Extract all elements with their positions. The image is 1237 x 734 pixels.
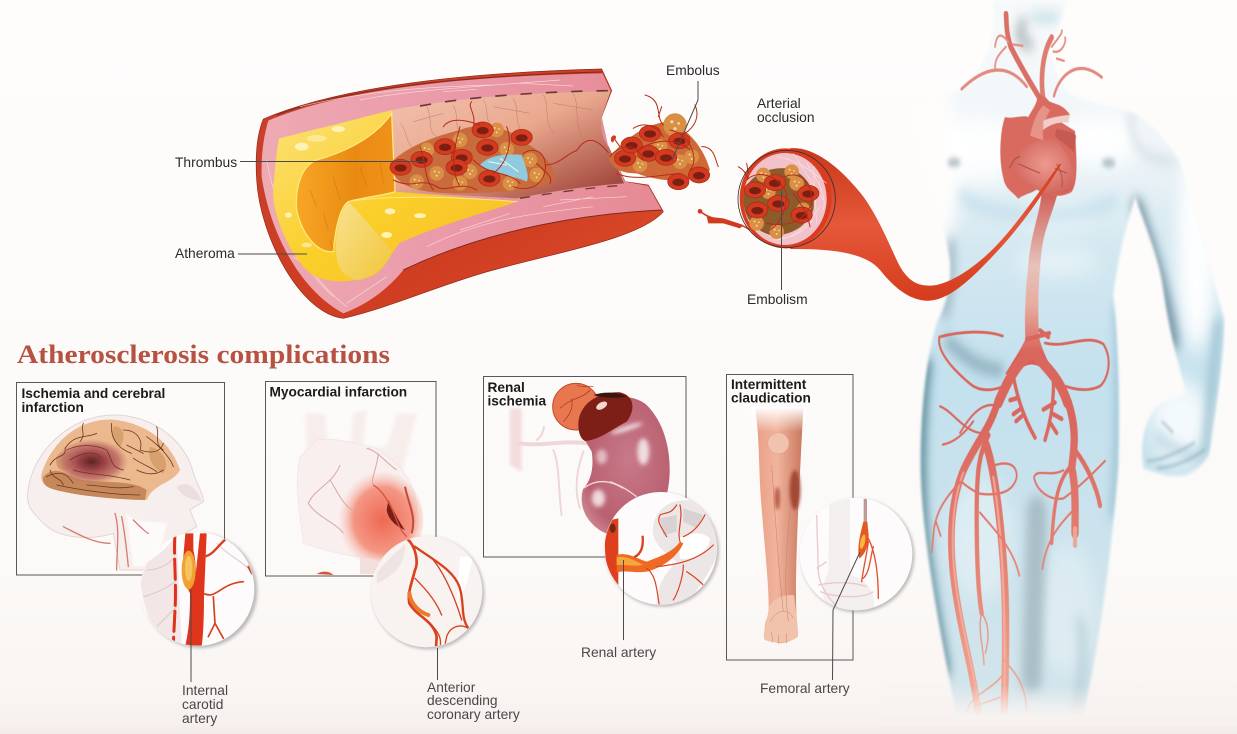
label: renal artery: Renal artery [581, 645, 656, 660]
label: Atheroma: Atheroma [175, 246, 235, 261]
panel: intermittent claudication [726, 374, 853, 660]
label: Embolism [747, 190, 808, 307]
nipples [947, 158, 961, 167]
icon: infarcted kidney pole [553, 383, 599, 430]
panel titles [22, 377, 811, 415]
outer red artery wall [256, 69, 663, 318]
tail artery leading to the heart [790, 148, 1061, 301]
label: Embolism: Embolism [747, 292, 808, 307]
label: internal carotid artery: artery [182, 711, 217, 726]
icon: pale heart [305, 410, 417, 477]
label: Embolus [666, 63, 720, 160]
neck arteries [962, 14, 1102, 112]
label: Thrombus: Thrombus [175, 155, 237, 170]
label: anterior descending coronary artery: Anterior [427, 680, 475, 695]
label: Atheroma [175, 246, 307, 261]
atheroma [273, 110, 517, 281]
callout: anterior descending coronary artery circle [371, 536, 484, 649]
label: internal carotid artery [182, 590, 228, 726]
icon: kidney [580, 397, 670, 535]
label: anterior descending coronary artery [427, 648, 520, 722]
title: Atherosclerosis complications [17, 340, 390, 369]
aorta [1005, 192, 1060, 386]
icon: skull [27, 415, 203, 570]
bottom fade over the body [880, 685, 1237, 725]
occluded lumen [698, 148, 835, 248]
main artery section with thrombus [256, 69, 663, 318]
panel titles: Ischemia and cerebral [22, 386, 165, 401]
label: Arterial occlusion: occlusion [757, 110, 815, 125]
panel titles: infarction [22, 400, 84, 415]
panel titles: Myocardial infarction [270, 384, 407, 400]
panel titles: Intermittent [731, 377, 806, 392]
panel titles: ischemia [488, 394, 546, 408]
label: internal carotid artery: carotid [182, 697, 223, 712]
label: femoral artery [760, 552, 860, 696]
narrowed orange lumen [296, 113, 395, 252]
label: Arterial occlusion: Arterial [757, 96, 801, 111]
pink wall layer [262, 73, 662, 313]
panel: ischemia and cerebral infarction [16, 382, 224, 575]
callout: renal artery circle [603, 492, 719, 607]
embolus cluster [608, 95, 718, 190]
thrombus clot [390, 102, 608, 193]
inner lumen wall [390, 91, 624, 198]
label: anterior descending coronary artery: descending [427, 693, 498, 708]
panel: myocardial infarction [266, 382, 436, 576]
callout: internal carotid artery circle [140, 532, 257, 648]
illustration: male body with arterial tree [918, 2, 1226, 714]
label: femoral artery: Femoral artery [760, 681, 850, 696]
label: Embolus: Embolus [666, 63, 720, 78]
icon: pale renal vessels [510, 408, 522, 472]
embolus clot and occluded artery [608, 95, 1061, 301]
cut plaque cone [336, 202, 392, 280]
label: internal carotid artery: Internal [182, 683, 228, 698]
panel titles: Renal [488, 380, 525, 395]
panel: renal ischemia [484, 376, 686, 557]
callout: femoral artery circle [800, 497, 914, 612]
icon: brain [41, 419, 180, 500]
label: anterior descending coronary artery: coronary artery [427, 707, 520, 722]
iliac and leg arteries [932, 330, 1109, 716]
panel titles: claudication [731, 390, 811, 406]
heart [1000, 94, 1076, 199]
icon: leg [755, 408, 803, 643]
hand fingers [1147, 421, 1205, 468]
label: renal artery [581, 560, 656, 660]
